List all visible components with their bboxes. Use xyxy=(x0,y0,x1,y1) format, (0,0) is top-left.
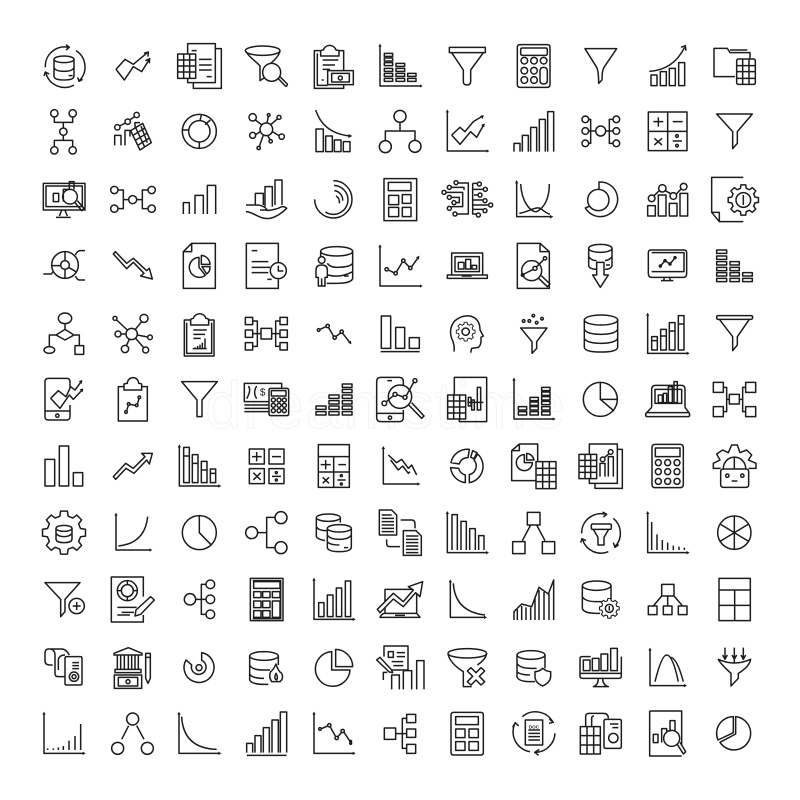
icon: three circle branch xyxy=(246,512,287,554)
icon: horizontal node connector xyxy=(111,186,155,212)
icon: segmented donut xyxy=(182,114,216,148)
icon: axes with falling zigzag xyxy=(382,446,420,486)
icon: funnel with cap xyxy=(449,47,485,85)
icon: plain funnel xyxy=(717,114,752,149)
icon: hub with six nodes xyxy=(582,116,620,147)
icon: area line graph xyxy=(514,580,554,620)
icon: pie chart xyxy=(583,382,617,416)
icon: calculator with four keys xyxy=(384,179,417,221)
icon: pie with separated wedge xyxy=(315,649,353,686)
icon: descending bars with axes xyxy=(446,511,489,554)
icon: funnel with lip xyxy=(717,316,753,351)
icon: document with magnifier chart xyxy=(517,243,550,288)
icon: five bars with baseline xyxy=(247,712,287,755)
icon: document with clock xyxy=(246,243,286,288)
icon: document in cycle arrows: DOC xyxy=(529,725,540,730)
icon: scroll with document xyxy=(45,649,82,685)
icon: clipboard with banknote xyxy=(314,45,353,88)
icon: document with table and chart xyxy=(448,377,487,422)
icon: straight funnel xyxy=(182,382,217,417)
icon: hand holding bars xyxy=(246,180,287,219)
icon: falling zigzag arrow xyxy=(113,252,152,279)
icon: four math squares xyxy=(249,449,284,484)
icon: documents with table xyxy=(178,44,221,88)
icon: two databases xyxy=(316,514,351,552)
icon: four math operators square xyxy=(648,112,687,151)
icon: block bars xyxy=(717,250,752,282)
icon: broken donut xyxy=(451,449,483,483)
icon: phone with magnifier chart xyxy=(377,377,424,422)
icon: square block hub xyxy=(245,317,287,350)
icon: database with shield xyxy=(517,651,551,686)
icon: pie outline xyxy=(182,516,216,550)
icon: document with donut and pen xyxy=(111,577,154,622)
icon: bars with line and dots xyxy=(648,183,688,216)
icon: database with down arrow xyxy=(589,244,612,287)
icon: funnel in cycle arrows xyxy=(581,512,620,553)
icon: banknotes with calculator xyxy=(244,383,289,416)
icon: falling line on axes xyxy=(312,712,356,755)
icon: concentric arcs xyxy=(315,181,352,218)
icon: document with gear xyxy=(712,177,758,222)
icon: person with database xyxy=(316,247,353,286)
icon: four-square hub xyxy=(713,382,756,417)
icon: line chart with axes xyxy=(378,244,423,288)
icon: folder with table xyxy=(714,48,755,84)
icon: chart with calculator xyxy=(115,112,151,150)
icon: spiral ring xyxy=(184,653,214,682)
icon: circle tree with three branches xyxy=(184,580,215,619)
icon: laptop with bars xyxy=(646,382,690,417)
icon: calculator with many keys xyxy=(250,578,283,621)
icon: document transfer xyxy=(379,510,421,555)
icon: block chart with axes xyxy=(512,377,556,421)
icon: funnel with dots xyxy=(521,314,547,353)
icon: clipboard with small bars xyxy=(184,314,214,356)
icon: funnel with down arrows xyxy=(718,648,751,686)
icon: funnel with plus xyxy=(45,583,84,617)
icon: database with gear xyxy=(582,581,619,618)
icon: calculator with operators xyxy=(318,445,349,487)
icon block: rows 5-7, right columns xyxy=(448,313,756,489)
icon: curved funnel xyxy=(585,49,617,83)
icon: network hub xyxy=(249,114,284,150)
icon: pie with left wedge xyxy=(717,717,751,750)
icon: document in cycle arrows xyxy=(513,712,555,755)
icon: ring with gap xyxy=(585,182,618,217)
icon: funnel with X xyxy=(448,649,487,687)
icon: small falling line xyxy=(317,324,351,344)
icon: three plain bars xyxy=(45,446,83,486)
icon: document with pen and bars xyxy=(377,646,424,689)
icon: large database xyxy=(584,315,618,352)
icon block: rows 8-11, left columns xyxy=(42,510,424,755)
icon: database with flame xyxy=(250,652,283,684)
icon: circuit brain xyxy=(442,181,493,217)
icon: three square tree xyxy=(513,512,555,554)
icon: calculator with round keys xyxy=(517,45,550,87)
icon block: rows 5-7, left columns xyxy=(44,313,424,488)
icon: document with pie and table xyxy=(512,444,556,489)
icon: document with pie chart xyxy=(183,243,215,288)
icon: two-tone bars with axes xyxy=(646,313,690,355)
icon: thin decay bars on axes xyxy=(646,511,690,554)
icon: bell curves on axes xyxy=(648,648,687,687)
icon block: rows 1-4, right columns xyxy=(442,45,758,288)
icon: funnel with magnifier xyxy=(245,46,287,86)
icon: decay curve with axes xyxy=(449,579,487,619)
watermark: dreamstime xyxy=(205,368,565,442)
icon: document with bars and magnifier xyxy=(650,711,686,756)
icon: gear with robot face xyxy=(713,445,756,487)
icon: rising curve on axes xyxy=(114,513,152,552)
icon: gear with database xyxy=(43,511,85,554)
icon: double zigzag arrows xyxy=(116,52,150,80)
icon: tree of circles xyxy=(51,110,76,154)
icon: axes with zigzag arrows xyxy=(446,109,489,153)
icon: documents with chart and table xyxy=(579,444,622,488)
icon: bars with rising curve xyxy=(649,46,686,86)
icon: network with six nodes xyxy=(113,314,152,353)
icon: decay curve on axes xyxy=(177,712,221,755)
icon: three bars xyxy=(183,185,216,214)
icon: calculator with six keys xyxy=(451,712,483,755)
icon: table grid xyxy=(719,578,750,621)
icon: monitor with line chart xyxy=(648,250,687,281)
icon: pie with six slices xyxy=(718,516,751,549)
icon: bank with money and pencil xyxy=(114,648,150,688)
icon: falling two-tone bars with axes xyxy=(178,444,221,488)
icon: low bars then tall on axes xyxy=(42,712,86,755)
icon: laptop with bar chart xyxy=(447,253,487,278)
icon: rising block bars xyxy=(316,384,352,415)
icon: org chart squares xyxy=(648,584,687,615)
icon: block tree xyxy=(384,714,416,753)
icon: laptop with rising arrow xyxy=(377,582,423,617)
icon: monitor with magnifier xyxy=(43,182,85,217)
icon: five rising bars xyxy=(514,112,554,152)
icon block: rows 8-11, right columns xyxy=(446,511,751,756)
icon: rising outlined arrow xyxy=(113,453,152,479)
icon block: rows 1-4, left columns xyxy=(43,44,423,288)
icon: falling curve over bars xyxy=(316,110,352,152)
icon: flowchart xyxy=(44,313,84,354)
icon: clipboard with line chart xyxy=(118,378,147,421)
icon: four bars with axes xyxy=(312,578,356,621)
icon: banknotes with calculator: $ xyxy=(260,388,266,399)
icon: three bars on baseline xyxy=(381,316,420,352)
icon: circle with inner hub and leads xyxy=(43,251,85,280)
icon: org tree of three circles xyxy=(379,110,421,153)
icon: stacked block chart with axes xyxy=(378,44,423,88)
icon: head with gear xyxy=(451,316,483,353)
icon: table with document xyxy=(580,713,621,754)
icon: monitor with bars xyxy=(580,648,621,687)
icon: three circle triangle xyxy=(112,713,153,754)
icon: database with cycle arrows xyxy=(44,45,85,87)
icon: phone with zigzag arrows xyxy=(45,378,83,420)
icon: calculator with nine round keys xyxy=(652,444,683,488)
icon: crossing curves on axes xyxy=(515,180,553,219)
